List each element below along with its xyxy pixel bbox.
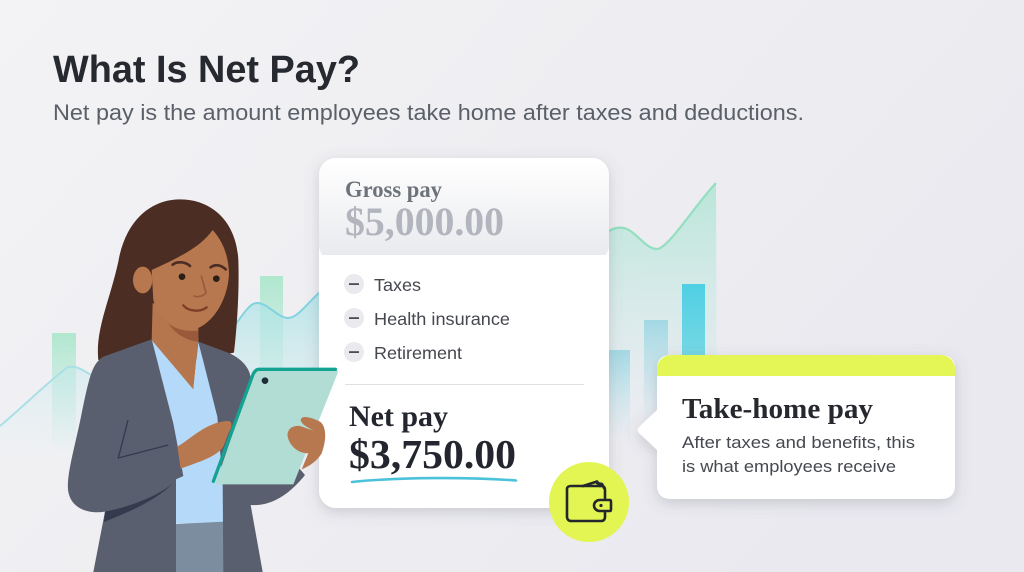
illustration: woman holding tablet bbox=[68, 199, 338, 572]
card header: gross pay: Gross pay bbox=[345, 177, 442, 202]
right hand bbox=[288, 417, 325, 469]
shirt bbox=[152, 340, 225, 523]
ear bbox=[133, 267, 152, 293]
net pay amount: $3,750.00 bbox=[349, 431, 516, 477]
left hand bbox=[177, 421, 231, 469]
panel: pay card bbox=[319, 158, 609, 508]
neck bbox=[152, 303, 198, 390]
title: What Is Net Pay? bbox=[53, 49, 360, 91]
chart: right background area and bars bbox=[605, 183, 717, 440]
panel: take-home pay callout: is what employees receive bbox=[682, 457, 896, 476]
trousers bbox=[176, 522, 225, 572]
subtitle: Net pay is the amount employees take home after taxes and deductions. bbox=[53, 100, 804, 125]
deductions list: Retirement bbox=[374, 343, 462, 363]
panel: take-home pay callout: Take-home pay bbox=[682, 393, 874, 425]
panel: take-home pay callout: After taxes and benefits, this bbox=[682, 433, 915, 452]
net pay amount bbox=[349, 400, 516, 482]
hair bbox=[98, 199, 239, 367]
chart: left background bars and line bbox=[0, 276, 320, 460]
jacket left bbox=[68, 339, 183, 572]
deductions list bbox=[344, 274, 510, 363]
deductions list: Health insurance bbox=[374, 309, 510, 329]
net pay amount: Net pay bbox=[349, 400, 448, 433]
face bbox=[152, 230, 229, 330]
jacket right bbox=[198, 342, 305, 572]
facial features bbox=[173, 262, 226, 311]
icon: wallet badge bbox=[549, 462, 629, 542]
card header: gross pay bbox=[319, 182, 609, 255]
card header: gross pay: $5,000.00 bbox=[345, 199, 504, 244]
neck shadow bbox=[168, 323, 198, 342]
tablet bbox=[213, 369, 338, 484]
jacket details bbox=[104, 420, 173, 522]
panel: take-home pay callout bbox=[638, 355, 955, 499]
deductions list: Taxes bbox=[374, 275, 421, 295]
